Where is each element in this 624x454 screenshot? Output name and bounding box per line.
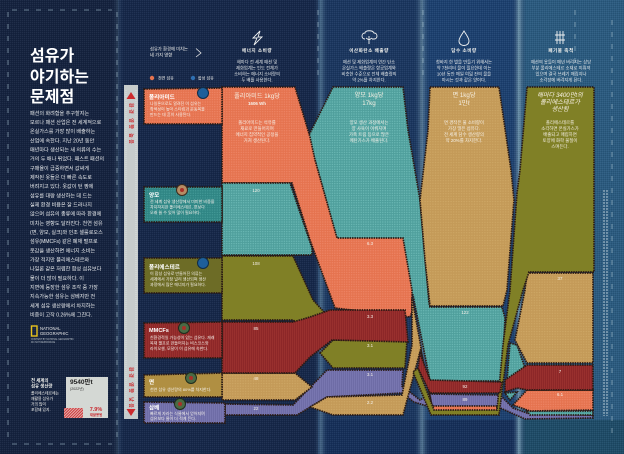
intro text block: 제작된 옷들은 더 빠른 속도로: [30, 174, 92, 181]
column header: water: 마시는 것과 같은 양이다.: [442, 76, 486, 84]
column header: waste: 있으며 결국 쓰레기 매립지나: [535, 70, 587, 78]
column header: carbon: 온실가스 배출량은 항공업계와: [342, 64, 396, 72]
carbon column text: 3.1: [367, 343, 374, 348]
energy column text: 48: [254, 376, 259, 381]
intro text block: 않으며 섬유의 종류에 따라 환경에: [30, 210, 102, 218]
flow: red MMCFs: [222, 310, 593, 393]
carbon column text: 6.3: [367, 241, 374, 246]
waste column text: 생산됨: [551, 105, 570, 113]
icon: waste threads: [555, 31, 565, 44]
waste column text: 6.1: [557, 392, 564, 397]
waste column text: 스며든다.: [551, 143, 569, 150]
water column text: 전 세계 담수 생산량의: [444, 131, 484, 138]
carbon column text: 메탄가스가 배출된다.: [350, 137, 388, 144]
carbon column text: [349, 91, 389, 405]
flow: orange polyamide band: [222, 87, 593, 412]
logo: National Geographic: GEOGRAPHIC: [40, 331, 68, 336]
flow: lavender silk: [225, 370, 593, 419]
water column text: 92: [463, 384, 468, 389]
label: MMCFs: [144, 322, 222, 358]
column header: carbon: 패션 및 제화업계의 연간 탄소: [343, 58, 395, 66]
column header: water: 담수 소비량: [451, 47, 477, 54]
carbon column text: 양 사육이 이뤄지며: [352, 125, 386, 132]
label: polyamide: 폴리아미드: [149, 93, 175, 101]
label: wool: 전 세계 섬유 생산량에서 미미한 비중을: [150, 198, 215, 204]
label: polyester: 세계에서 가장 널리 생산되며 생산: [150, 276, 206, 282]
intro text block: 구매율이 급증하면서 값싸게: [30, 165, 89, 172]
intro text block: [30, 110, 104, 318]
column header: energy: 해마다 전 세계 패션 및: [237, 58, 277, 66]
label: wool: 양모: [149, 191, 159, 199]
waste column text: [537, 91, 584, 397]
environmental impact scale tag: 환경 영향 낮음: [128, 367, 134, 409]
column header: water: [436, 47, 492, 84]
legend and intro arrow: 천연 섬유: [158, 74, 174, 80]
flow: tan cotton: [222, 87, 593, 415]
intro text block: 거의 두 배나 뛰었다. 패스트 패션의: [30, 156, 104, 162]
water column text: 면 1kg당: [452, 91, 476, 99]
energy column text: 120: [252, 188, 260, 193]
label: silk: 섬유보다 물이 더 적게 든다.: [150, 415, 196, 421]
intro text block: 가장 적지만 폴리에스테르와: [30, 256, 89, 264]
label: silk: [144, 402, 225, 423]
column header: energy: [234, 47, 280, 84]
intro text block: 산업에 속한다. 지난 20년 동안: [30, 138, 95, 144]
label: polyamide: [144, 88, 222, 124]
intro text block: 섬유(MMCFs) 같은 폐재 펄프로: [30, 238, 98, 245]
carbon column text: 17kg: [362, 100, 376, 107]
column header: energy: 제화업계는 인도 전체가: [236, 64, 278, 72]
label: polyamide: 확색성이 높아 스타킹과 운동복을: [150, 106, 205, 112]
waste column text: 해마다 3400만t의: [537, 91, 584, 99]
environmental impact scale tag: [124, 85, 138, 419]
label: polyester: 이 합성 섬유로 만들어진 의류는: [150, 270, 203, 276]
intro text block: 물이 더 많이 필요하다. 이: [30, 275, 84, 282]
column header: energy: 소비하는 에너지 소비량의: [234, 70, 280, 78]
water column text: 1만ℓ: [458, 99, 470, 107]
label: polyester: [144, 258, 222, 293]
energy column text: 108: [252, 261, 260, 266]
tag: 9540만t production: 9540만t: [70, 377, 93, 386]
column header: carbon: [342, 47, 397, 84]
energy column text: 에너지 집약적인 공정을: [236, 131, 278, 138]
label: wool: [144, 187, 222, 222]
label: cotton: [144, 373, 222, 397]
energy column text: 1606 Wh: [248, 101, 266, 106]
waste column text: 폴리에스테르를: [546, 119, 574, 126]
label: MMCFs: 목재 펄프로 만들어지는 비스코스와: [150, 340, 209, 346]
intro text block: 패션의 화려함을 추구할지는: [30, 110, 89, 117]
label: polyester: 과정에서 많은 에너지가 필요하다.: [150, 281, 206, 287]
energy column text: 재료로 만들어지며: [240, 125, 274, 132]
intro text block: 옷감을 생산하면 에너지 소비는: [30, 248, 95, 254]
energy column text: 22: [254, 406, 259, 411]
water column text: 약 20%를 차지한다.: [446, 137, 482, 144]
title: 문제점: [30, 88, 74, 106]
logo: National Geographic: DO NOT REPRODUCE: [31, 342, 56, 344]
intro text block: 온실가스를 가장 많이 배출하는: [30, 128, 95, 135]
text: world fibre production: [31, 377, 59, 412]
energy column text: 거쳐 생산된다.: [244, 137, 270, 144]
water column text: 가장 많은 섬유다.: [448, 125, 480, 132]
water column text: 면 경작은 물 소비량이: [444, 119, 484, 126]
column header: waste: 패션의 옷들이 매년 버려지는 상당: [531, 58, 591, 66]
label: cotton: 천연 섬유 생산량의 80%를 차지한다.: [150, 386, 211, 392]
intro text block: 나일론 같은 저렴한 합성 섬유보다: [30, 266, 102, 272]
carbon column text: 양모 생산 과정에서는: [350, 119, 388, 126]
column header: water: 약 7천리터 물이 필요한데 이는: [437, 64, 491, 72]
intro text block: 실제 환경 비용은 잘 드러나지: [30, 202, 92, 208]
title: [30, 47, 89, 106]
logo: National Geographic: NATIONAL: [40, 326, 61, 331]
icon: lightning: [253, 31, 262, 45]
column header: energy: 두 배를 사용한다.: [241, 76, 273, 84]
carbon column text: 2.2: [367, 400, 374, 405]
waste column text: 토양에 화학 물질이: [543, 137, 577, 144]
text: world fibre production: 섬유 생산량: [31, 382, 52, 390]
label: MMCFs: 친환경적일 가능성이 있는 섬유다. 재래: [150, 334, 215, 340]
column header: water: 10년 동안 매일 여덟 잔의 물을: [437, 70, 491, 78]
intro text block: 섬유를 대량 생산하는 데 드는: [30, 192, 92, 200]
energy column text: 85: [254, 326, 259, 331]
waste column text: 7: [559, 369, 562, 374]
text: world fibre production: 포함돼 있지.: [31, 407, 51, 412]
energy column text: [234, 92, 280, 411]
tag: 9540만t production: 7.9%: [90, 407, 102, 413]
water column text: [444, 91, 484, 402]
water column text: 89: [463, 397, 468, 402]
intro text block: 버려지고 있다. 옷값이 턴 짱에: [30, 183, 94, 190]
waste column text: 배출되고 매립하면: [543, 131, 577, 138]
label: MMCFs: MMCFs: [149, 328, 169, 334]
intro text block: 지면에 등장한 섬유 조각 중 가장: [30, 284, 98, 291]
label: wool: 차지하지만 폴리에스테르, 면보다: [150, 204, 205, 210]
tag: 9540만t production: 재활용됨: [90, 412, 102, 417]
energy column text: 폴리아미드 1kg당: [234, 92, 280, 100]
intro text block: 매년마다 생산되는 새 의류의 수는: [30, 146, 102, 154]
flow: olive polyester: [222, 87, 594, 415]
label: cotton: 면: [149, 378, 154, 386]
carbon column text: 3.3: [367, 314, 374, 319]
water column text: 122: [461, 310, 469, 315]
intro text block: 지속가능한 섬유는 삼베지만 전: [30, 293, 95, 300]
legend and intro arrow: 합성 섬유: [198, 74, 214, 80]
text: world fibre production: 거의 많이: [31, 402, 46, 406]
column header: energy: 에너지 소비량: [242, 47, 272, 54]
flow: teal wool: [308, 87, 593, 415]
logo: National Geographic: [31, 326, 74, 344]
label: polyamide: 만드는 데 흔히 사용된다.: [150, 111, 191, 117]
label: wool: 오래 쓸 수 있어 많이 필요하다.: [150, 209, 201, 215]
title: 야기하는: [30, 68, 89, 86]
column header: waste: 소각장에 버려지게 된다.: [539, 76, 583, 84]
energy column text: 폴리아미드는 석유를: [238, 119, 276, 126]
buttons: [174, 88, 208, 410]
intro text block: (면, 양모, 실크)와 인조 셀룰로오스: [30, 229, 103, 236]
column header: carbon: 비슷한 수준으로 전체 배출량의: [342, 70, 397, 78]
column header: carbon: 이산화탄소 배출량: [349, 47, 389, 54]
carbon column text: 양모 1kg당: [355, 91, 384, 99]
waste column text: 37: [558, 276, 563, 281]
waste column text: 소각하면 온실가스가: [541, 125, 579, 132]
tag: 9540만t production: (2022년): [70, 386, 84, 391]
legend and intro arrow: 네 가지 영향: [150, 52, 172, 58]
intro text block: 세계 섬유 생산량에서 차지하는: [30, 302, 95, 310]
carbon column text: 3.1: [367, 372, 374, 377]
column header: waste: 폐기물 축적: [548, 47, 574, 54]
label: polyester: 폴리에스테르: [149, 263, 180, 271]
text: world fibre production: 재활용 섬유가: [31, 396, 54, 401]
intro text block: 미치는 영향도 달라진다. 천연 섬유: [30, 220, 103, 227]
column header: water: 청바지 한 벌을 만들기 위해서는: [436, 58, 492, 66]
column header: waste: [531, 47, 591, 84]
text: world fibre production: 폴리에스테르에는: [31, 390, 59, 396]
legend and intro arrow: [150, 46, 214, 80]
waste column text: 폴리에스테르가: [540, 98, 581, 106]
logo: National Geographic: CONTENT BY NATIONAL GEOGRAPHIC: [31, 338, 74, 341]
icon: cloud and tree: [362, 31, 377, 44]
icon: water drop: [459, 31, 469, 46]
legend and intro arrow: 섬유가 환경에 미치는: [150, 46, 188, 52]
intro text block: 비중이 고작 0.26%에 그친다.: [30, 312, 92, 318]
text: world fibre production: 전 세계의: [31, 377, 48, 384]
carbon column text: 가축 트림 등으로 많은: [349, 131, 389, 138]
column header: carbon: 약 2%를 차지한다.: [352, 76, 386, 84]
label: silk: 삼베: [149, 404, 159, 412]
label: MMCFs: 라이오셀, 모달이 이 섬유에 속한다.: [150, 345, 208, 351]
title: 섬유가: [30, 47, 74, 65]
label: silk: 빠르게 자라는 식물에서 얻어지며: [150, 410, 205, 416]
environmental impact scale tag: 환경 영향 높음: [128, 103, 134, 145]
tag: 9540만t production: [64, 377, 108, 418]
column header: waste: 부분 폴리에스테르 소재로 이뤄져: [532, 64, 591, 72]
flow: teal wool left block: [222, 183, 312, 255]
label: polyamide: 나일론으로도 알려진 이 섬유는: [150, 100, 201, 106]
intro text block: 모르나 패션 산업은 전 세계적으로: [30, 119, 102, 126]
